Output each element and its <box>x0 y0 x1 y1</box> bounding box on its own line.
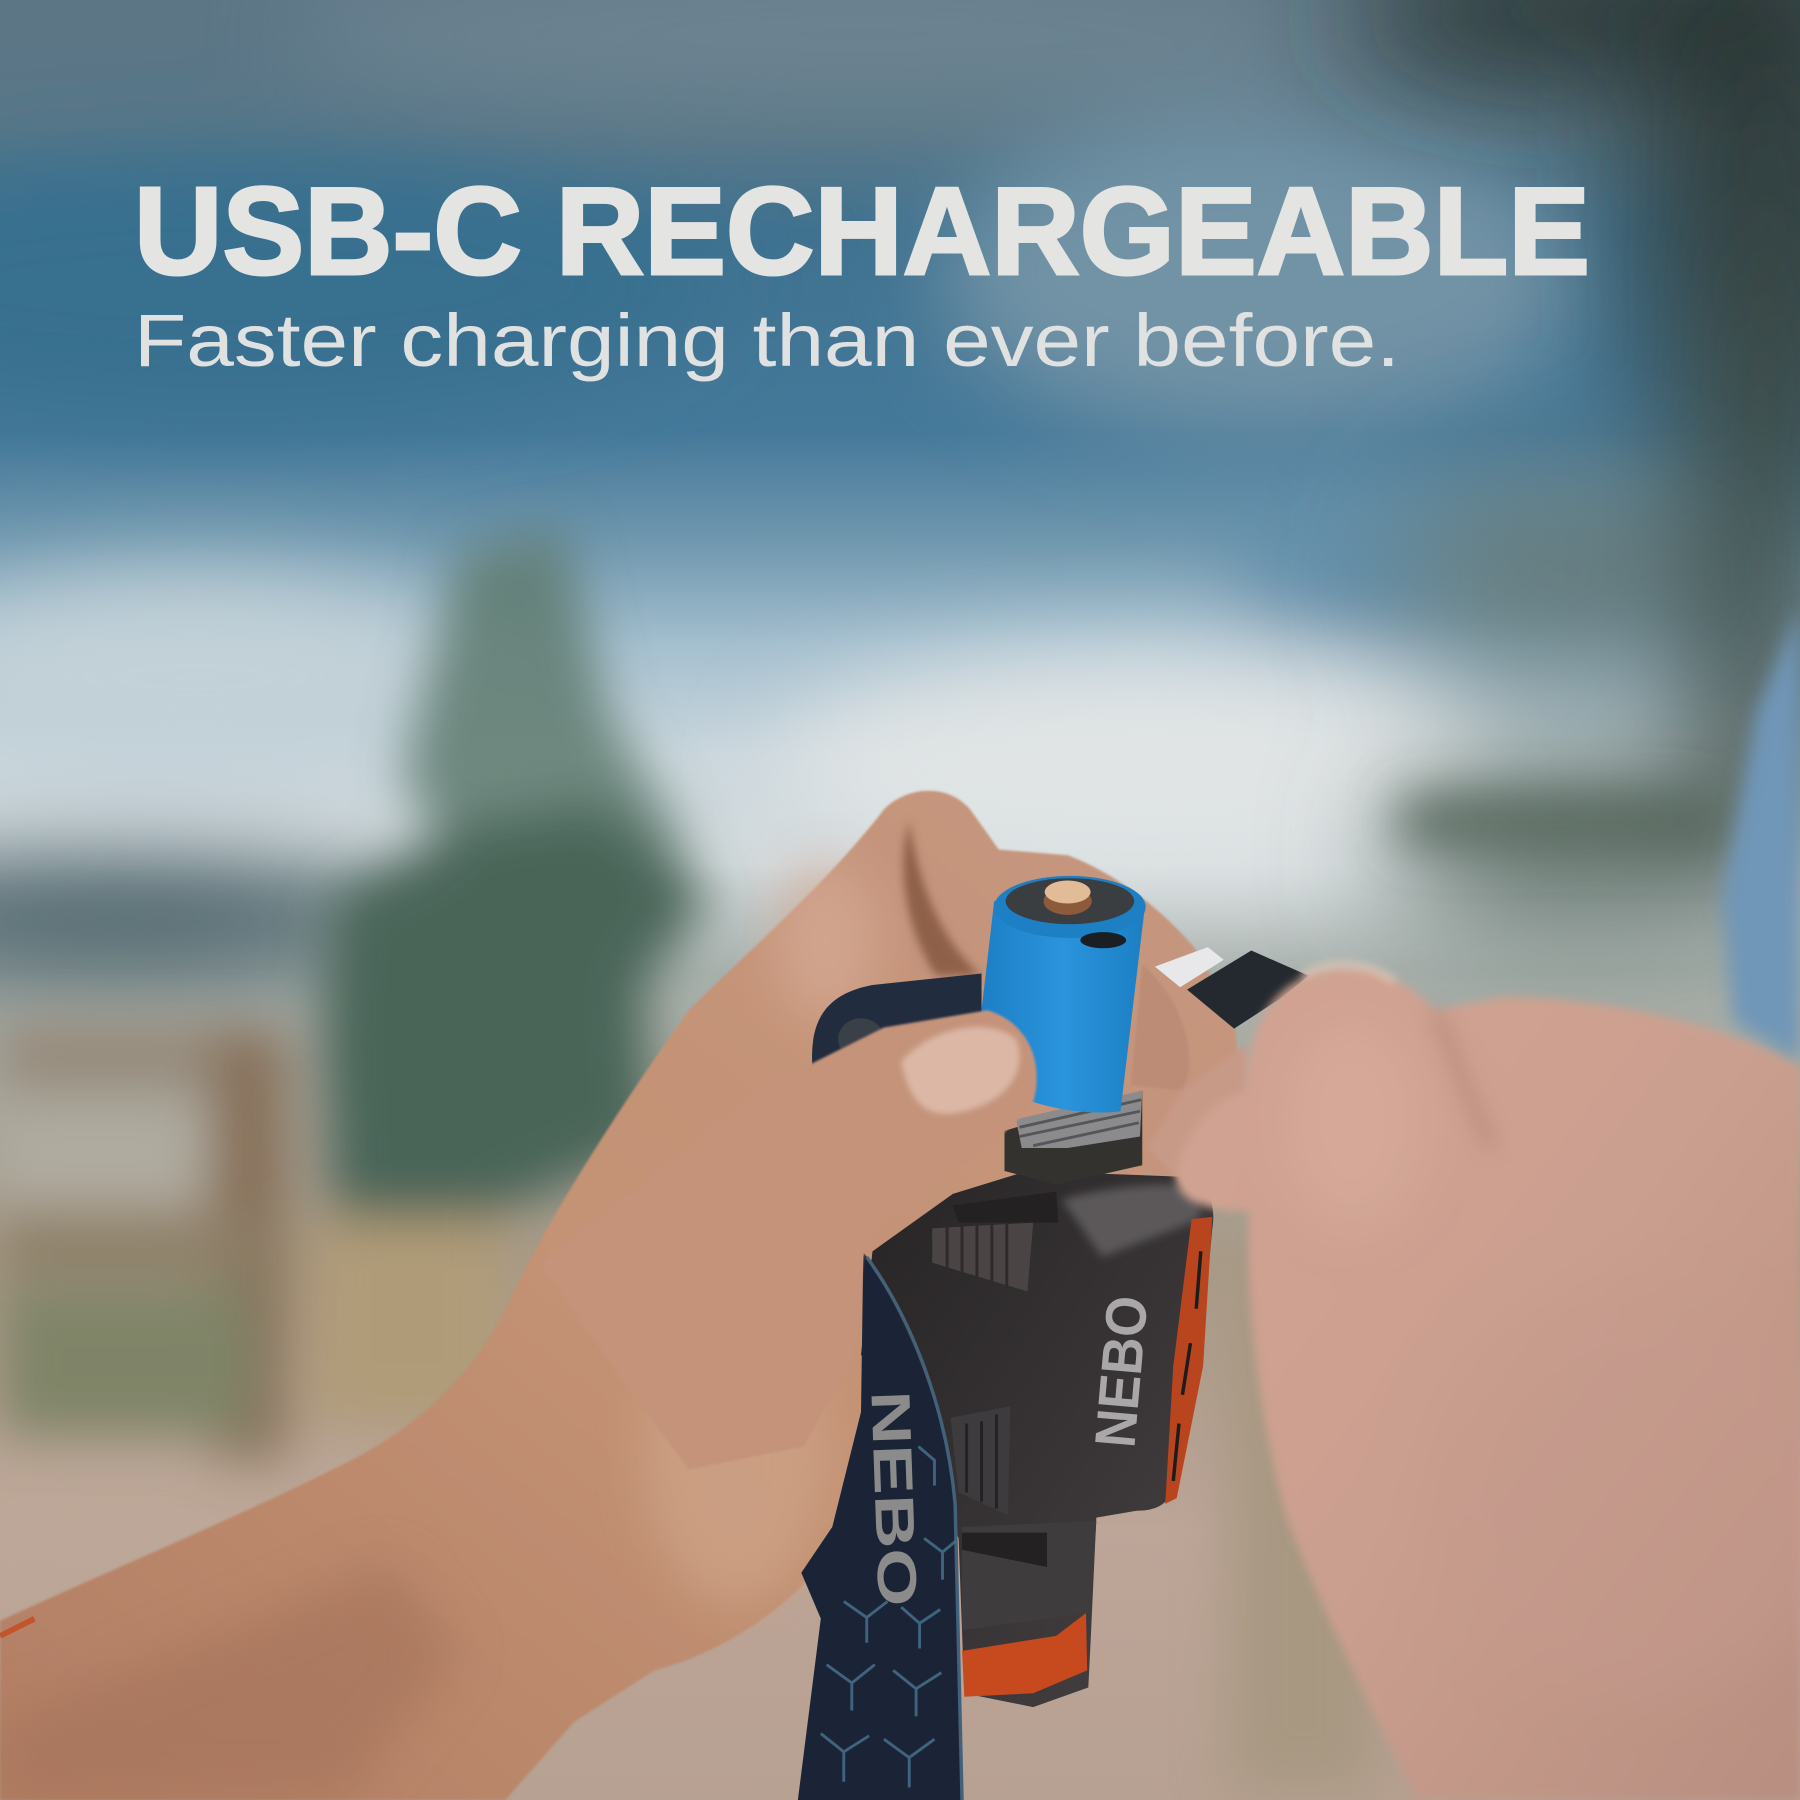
threaded neck <box>1004 1091 1142 1185</box>
thumbnail <box>901 1027 1020 1114</box>
thumb over the battery <box>540 1010 1037 1469</box>
rechargeable headlamp body <box>861 1091 1213 1707</box>
USB-C battery <box>982 876 1146 1113</box>
left hand holding the headlamp <box>0 791 1240 1800</box>
orange front bezel <box>962 1613 1087 1697</box>
USB-C port slot <box>1080 932 1126 948</box>
subtitle: Faster charging than ever before. <box>134 299 1400 382</box>
finger and palm shading <box>0 821 982 1800</box>
side logo: NEBO <box>1083 1293 1160 1450</box>
strap hexagon pattern <box>821 1446 956 1787</box>
orange side lenses <box>1165 1217 1212 1504</box>
supporting fingers behind the battery <box>1131 964 1257 1205</box>
headband strap <box>798 974 982 1800</box>
strap logo: NEBO <box>859 1390 929 1607</box>
USB-C cable <box>1155 947 1309 1029</box>
right hand plugging in the cable <box>1177 965 1800 1800</box>
title: USB-C RECHARGEABLE <box>134 163 1590 301</box>
copper contact pin <box>1044 881 1092 915</box>
bracelet edge on wrist <box>0 1619 34 1636</box>
